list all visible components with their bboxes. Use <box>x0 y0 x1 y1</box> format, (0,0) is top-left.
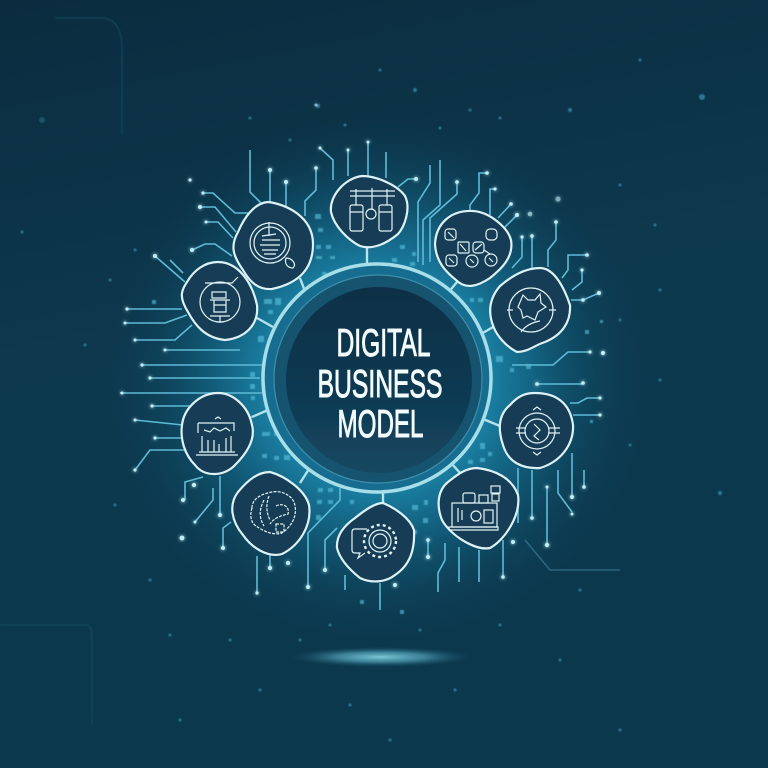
node: bottom-left brain <box>232 472 309 555</box>
node: top-left target <box>233 202 313 289</box>
icon: containers and pipes <box>350 188 395 231</box>
icon: crosshair <box>516 407 560 455</box>
node: top-right network <box>435 211 511 286</box>
hub outer ring <box>263 264 491 492</box>
title text <box>318 322 442 446</box>
icon: connected squares <box>445 229 497 267</box>
node: right globe <box>490 268 570 352</box>
central hub <box>263 264 491 492</box>
circuit board pixel blocks around hub <box>152 214 603 614</box>
icon: laptop with boxes <box>449 486 500 530</box>
icon: podium in circle <box>200 277 240 323</box>
icon: circular target with leaf <box>250 222 294 268</box>
title text: MODEL <box>338 403 424 446</box>
glowing circuit nodes <box>120 104 605 595</box>
icon: speech bubble and gear <box>352 525 396 558</box>
icon: sketched brain <box>251 492 295 534</box>
title text: DIGITAL <box>336 322 430 365</box>
node: top cans <box>331 176 407 247</box>
icon: columned building <box>196 417 238 455</box>
title text: BUSINESS <box>318 363 442 406</box>
background glow behind hub <box>108 118 648 642</box>
hub middle ring <box>274 275 482 483</box>
circuit traces <box>120 142 620 610</box>
node: bottom chat and gear <box>337 503 414 581</box>
node: lower-left building <box>182 393 253 474</box>
connector spokes <box>252 246 500 503</box>
node: bottom-right laptop <box>439 468 518 548</box>
node: right crosshair <box>500 393 573 468</box>
icon: globe with fox shape <box>507 288 556 332</box>
node: left podium <box>182 262 257 340</box>
floor light reflection <box>291 647 471 667</box>
hub dark disc <box>286 287 472 473</box>
faint corner circuit lines <box>0 18 122 725</box>
